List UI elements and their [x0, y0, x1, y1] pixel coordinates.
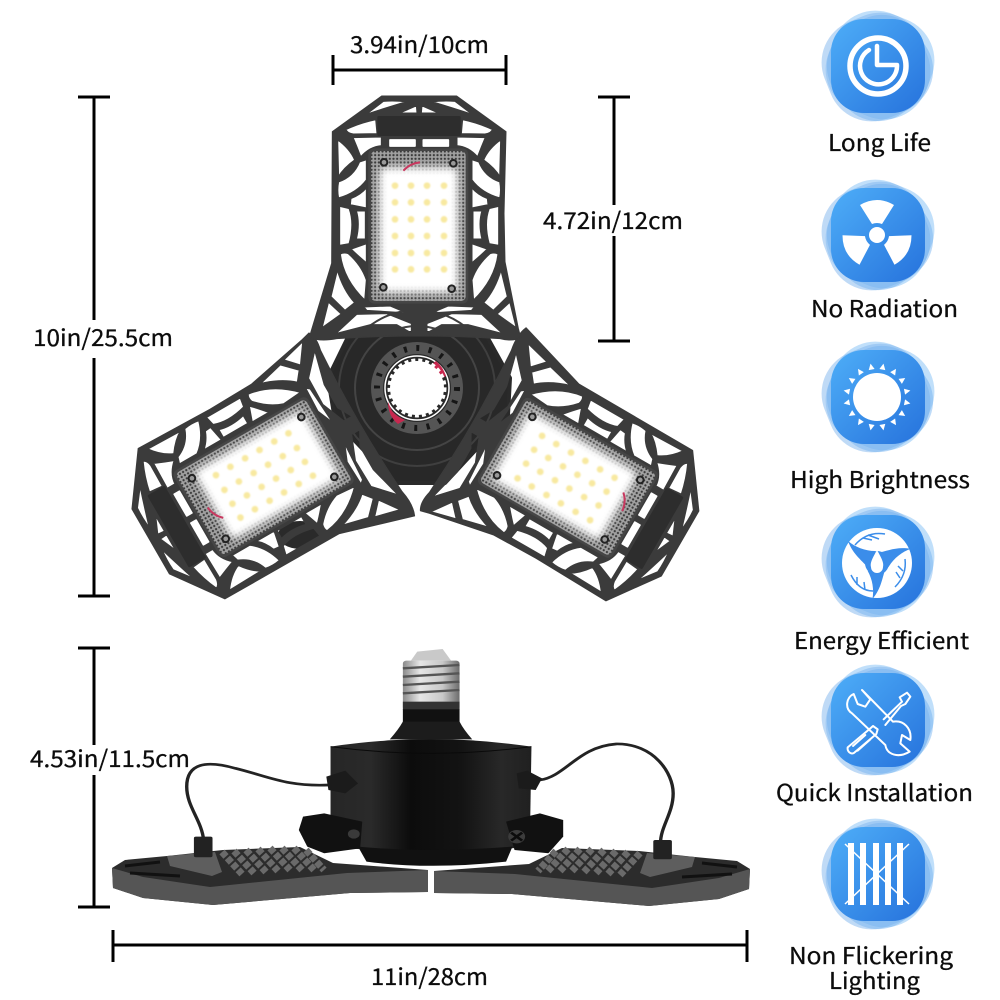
dimension: top panel width: 3.94in/10cm	[350, 26, 489, 60]
label: no radiation: No Radiation	[811, 290, 958, 324]
icon: no radiation	[808, 166, 950, 307]
side view: hub body	[331, 739, 531, 866]
side view: cables	[187, 744, 673, 843]
label: long life: Long Life	[828, 124, 931, 158]
front view: top lamp panel	[309, 96, 521, 340]
dimension: folded width	[113, 930, 747, 992]
dimension: folded width: 11in/28cm	[371, 958, 488, 992]
side view: connectors and hinges	[194, 771, 672, 859]
side view: right folded panel	[434, 848, 750, 906]
dimension: overall diameter	[33, 97, 173, 596]
icon: high brightness	[808, 328, 950, 469]
icon: energy efficient	[808, 493, 950, 634]
dimension: overall diameter: 10in/25.5cm	[33, 319, 173, 353]
icon: non flickering	[808, 805, 950, 946]
dimension: panel length: 4.72in/12cm	[543, 202, 683, 236]
label: high brightness: High Brightness	[790, 461, 970, 495]
label: non flickering lighting	[789, 937, 953, 996]
front view: right lamp panel	[418, 326, 735, 631]
side view: screw base	[390, 649, 472, 739]
side view: left folded panel	[112, 847, 428, 905]
dimension: height	[30, 648, 190, 907]
label: non flickering lighting: Lighting	[829, 962, 920, 996]
label: energy efficient: Energy Efficient	[794, 622, 969, 656]
front view: hub	[278, 310, 510, 549]
icon: quick installation	[808, 651, 950, 792]
side view: lamp	[112, 649, 750, 906]
dimension: panel length	[543, 97, 683, 341]
dimension: height: 4.53in/11.5cm	[30, 740, 190, 774]
front view: left lamp panel	[100, 332, 417, 637]
label: non flickering lighting: Non Flickering	[789, 937, 953, 971]
icon: long life	[808, 0, 950, 138]
dimension: top panel width	[333, 26, 506, 85]
label: quick installation: Quick Installation	[776, 774, 973, 808]
